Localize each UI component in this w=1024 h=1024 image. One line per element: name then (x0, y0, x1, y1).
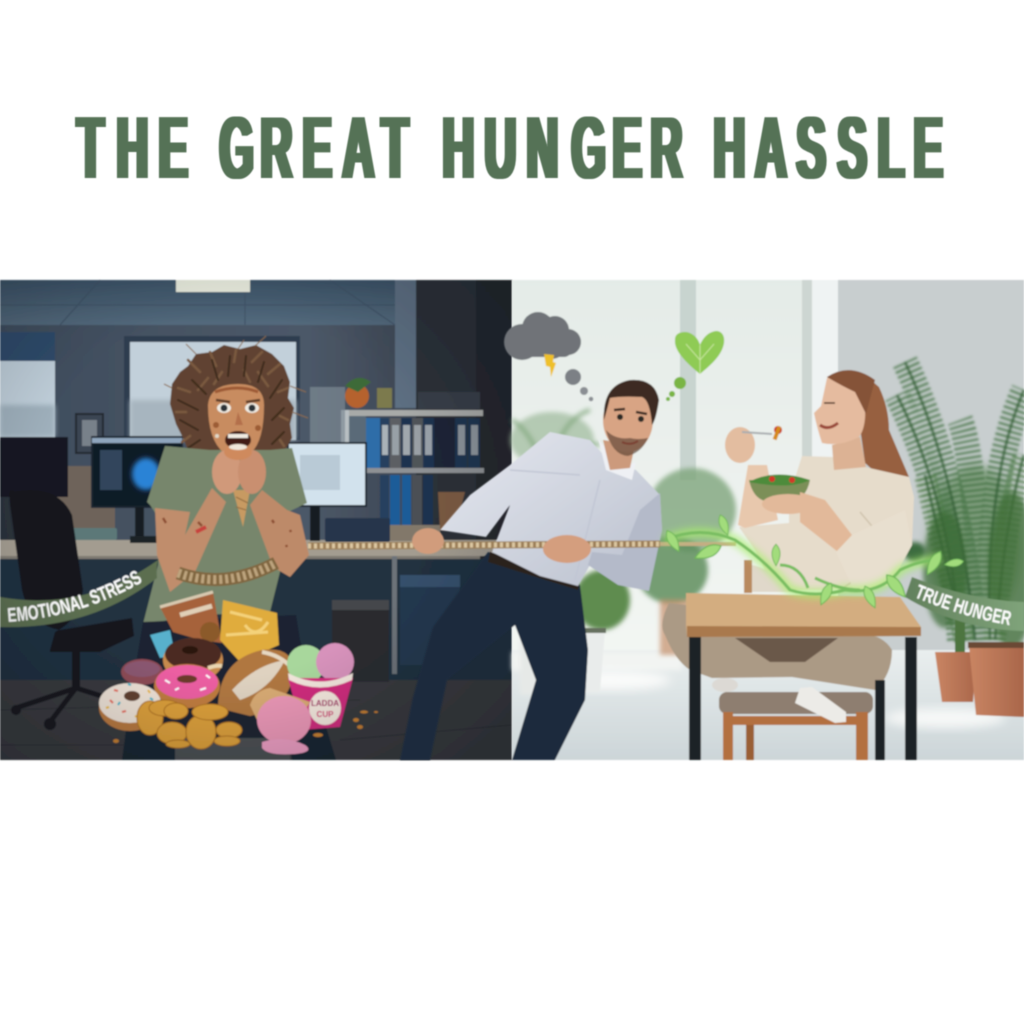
sleeve (588, 493, 662, 591)
office background (0, 280, 512, 760)
office chair (10, 490, 137, 730)
collar (598, 438, 636, 480)
panel: emotional stress office scene (0, 278, 513, 762)
pink donut (154, 664, 220, 708)
rope: tug of war (308, 544, 660, 546)
title: THE GREAT HUNGER HASSLE (77, 98, 943, 197)
long hair (827, 371, 909, 477)
blue wrapper (150, 630, 175, 658)
glowing vine (663, 513, 964, 610)
wild hair (164, 336, 308, 464)
white pot plant (580, 628, 606, 692)
ice cream tub: CUP (317, 710, 334, 719)
tipped ice cream cup (250, 688, 311, 754)
chip bag: chocolate (160, 592, 222, 643)
cross-legged trousers (662, 603, 892, 690)
ice cream tub: LADDA (311, 699, 339, 708)
thought cloud: storm (504, 312, 593, 401)
neck and head (603, 380, 659, 470)
socked feet (712, 678, 846, 723)
hands holding cone (212, 444, 266, 527)
bright room background (512, 280, 1024, 760)
shelf with binders (310, 378, 484, 682)
rope: right end under vine (660, 542, 736, 546)
chip bag: yellow (220, 600, 279, 662)
purple donut (121, 659, 163, 685)
hands on rope (412, 528, 591, 563)
stressed woman figure (143, 336, 309, 624)
arms (155, 488, 309, 592)
rope around waist (178, 563, 276, 580)
ice cream tub (287, 643, 354, 730)
panel: true hunger calm scene (308, 280, 1024, 762)
woman eating salad (662, 370, 914, 690)
belt (488, 552, 580, 590)
desk monitors (72, 437, 440, 543)
trousers (400, 552, 588, 760)
crumbs (113, 710, 378, 743)
stained shirt (143, 446, 307, 624)
vine leaves (663, 513, 964, 610)
shirt (440, 432, 662, 590)
bread (218, 649, 294, 716)
banner: true hunger: TRUE HUNGER (916, 583, 1012, 626)
holding arm (762, 492, 912, 592)
man pulling rope (308, 380, 662, 760)
banner: emotional stress: EMOTIONAL STRESS (6, 570, 142, 623)
food pile (99, 592, 378, 754)
face and neck (814, 370, 875, 470)
terracotta pots (935, 618, 1024, 717)
vignette (0, 280, 512, 760)
raised arm with fork (725, 426, 782, 528)
sweater (739, 456, 914, 590)
face (208, 384, 264, 458)
blurred background plants (510, 410, 736, 695)
table (686, 593, 921, 760)
thought bubble: leaf heart (666, 331, 724, 401)
chocolate donut (163, 638, 223, 682)
chair (719, 560, 873, 760)
palm plant (897, 362, 1024, 648)
salad bowl (749, 474, 810, 501)
potato chips (137, 700, 242, 749)
legs and table top below the food (122, 615, 336, 760)
sprinkle donut (99, 683, 161, 731)
